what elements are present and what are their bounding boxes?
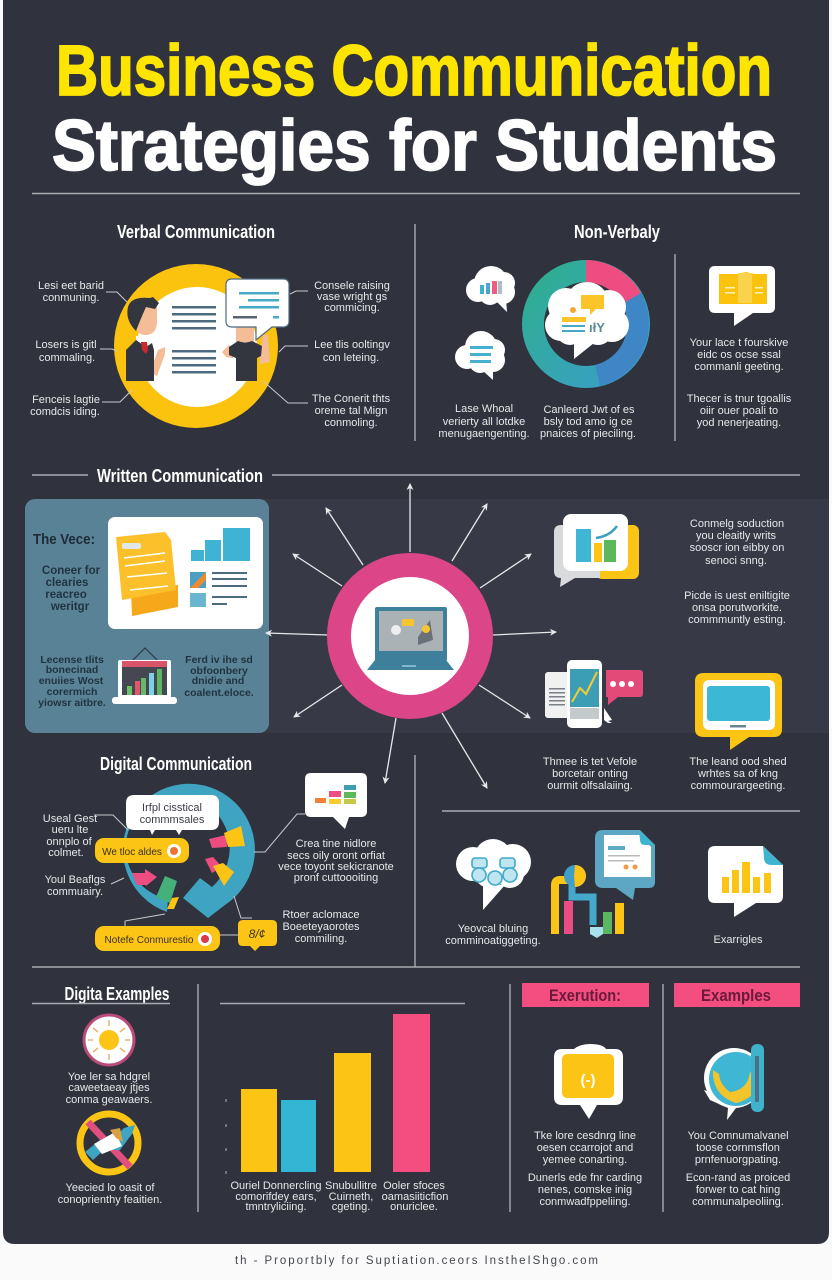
bar labels xyxy=(230,1180,448,1213)
text: verbal right labels xyxy=(312,280,391,429)
icon: chart document bubble xyxy=(708,846,783,917)
text: handshake caption: Yeecied lo oasit of xyxy=(66,1182,155,1194)
icon: laptop xyxy=(367,607,454,670)
text: execution captions: nenes, comske inig xyxy=(538,1184,632,1196)
text: written right captions: you cleaitly writs xyxy=(696,530,777,542)
text: digital right captions: Crea tine nidlore xyxy=(296,838,376,850)
text: non-verbal captions: verierty all lotdke xyxy=(443,416,525,428)
donut chart xyxy=(533,260,649,386)
text: digital left labels: colmet. xyxy=(48,847,84,859)
text: execution captions: Tke lore cesdnrg line xyxy=(534,1130,636,1142)
text: verbal left labels: Lesi eet barid xyxy=(38,280,104,292)
arrows xyxy=(266,484,556,788)
icon: monitor bubble xyxy=(695,673,782,750)
heading: digital communication: Digital Communication xyxy=(100,754,252,774)
icon: right person xyxy=(222,324,270,381)
text: examples captions xyxy=(686,1130,790,1208)
text: non-verbal right captions: commanli geeting. xyxy=(694,361,784,373)
text: digital left labels xyxy=(43,813,106,898)
text: the voice heading: The Vece: xyxy=(33,531,95,548)
pill: note communication xyxy=(95,926,220,951)
hub ring xyxy=(339,565,481,707)
text: written lower captions: wrhtes sa of kng xyxy=(697,768,778,780)
panel: digital examples xyxy=(32,984,170,1206)
text: verbal left labels: Losers is gitl xyxy=(35,339,97,351)
panel: verbal communication xyxy=(30,222,391,429)
text: digital right captions: Boeeteyaorotes xyxy=(282,921,360,933)
icon: small yellow bubble xyxy=(238,920,277,951)
text: digital right captions: pronf cuttoooiting xyxy=(294,872,378,884)
heading: written communication: Written Communication xyxy=(97,466,263,486)
bar labels: Ooler sfoces xyxy=(383,1180,445,1192)
text: written lower captions: commourargeeting. xyxy=(691,780,785,792)
heading: non-verbal: Non-Verbaly xyxy=(574,222,660,242)
text: written right captions: Picde is uest eniltigite xyxy=(684,590,790,602)
text: teal card right caption: obfoonbery xyxy=(190,665,248,677)
text: verbal right labels: The Conerit thts xyxy=(312,393,391,405)
icon: central cloud bubble xyxy=(545,282,629,359)
panel: execution xyxy=(522,983,649,1208)
band: written section background xyxy=(260,499,829,733)
heading: examples: Examples xyxy=(701,986,771,1005)
text: teal card right caption: Ferd iv ihe sd xyxy=(185,654,253,666)
text: execution captions: oesen ccarrojot and xyxy=(537,1142,633,1154)
text: teal card left caption: enuiies Wost xyxy=(39,675,104,687)
diagram: circular arrow xyxy=(123,784,255,918)
text: handshake caption: conoprienthy feaitien. xyxy=(58,1194,162,1206)
text: non-verbal right captions: eidc os ocse ssal xyxy=(697,349,781,361)
text: teal card left caption: bonecinad xyxy=(46,664,98,676)
bar labels: Ouriel Donnercling xyxy=(230,1180,322,1192)
text: sun caption: caweetaeay jtjes xyxy=(68,1082,150,1094)
callout: bubble xyxy=(126,795,219,835)
card: document and chart xyxy=(108,517,263,629)
icon: small yellow bubble: 8/¢ xyxy=(249,927,266,941)
text: teal card right caption: dnidie and xyxy=(192,675,244,687)
text: examples captions: forwer to cat hing xyxy=(696,1184,780,1196)
text: execution captions: conmwadfppeliing. xyxy=(539,1196,631,1208)
text: digital left labels: Youl Beaflgs xyxy=(45,874,106,886)
text: digital left labels: commuairy. xyxy=(47,886,103,898)
text: career for clearness: Coneer for xyxy=(42,565,101,577)
text: written right captions: commmuntly esting. xyxy=(688,614,786,626)
icon: calendar bubble: (-) xyxy=(580,1072,596,1089)
icon: list cloud xyxy=(455,331,505,380)
bar chart xyxy=(220,1004,465,1213)
text: examples captions: communalpeoliing. xyxy=(692,1196,784,1208)
text: non-verbal captions xyxy=(438,403,636,440)
text: coins caption: Yeovcal bluing xyxy=(458,923,528,935)
text: non-verbal captions: Lase Whoal xyxy=(455,403,513,415)
axis ticks xyxy=(225,1099,227,1174)
text: examples captions: Econ-rand as proiced xyxy=(686,1172,790,1184)
icon: central cloud bubble: ıłY xyxy=(589,320,605,335)
pill: note communication: Notefe Conmurestio xyxy=(105,935,194,946)
bars xyxy=(241,1014,430,1172)
icon: globe bubble xyxy=(704,1044,764,1120)
text: verbal right labels: conmoling. xyxy=(324,417,378,429)
text: verbal left labels: comdcis iding. xyxy=(30,406,100,418)
text: examples captions: toose cornmsflon xyxy=(696,1142,780,1154)
text: non-verbal captions: pnaices of pieciling. xyxy=(540,428,636,440)
icon: list rows xyxy=(190,572,247,607)
text: written right captions: onsa porutworkite. xyxy=(692,602,782,614)
text: written right captions: senoci snng. xyxy=(705,555,767,567)
text: teal card left caption: corermich xyxy=(47,686,97,698)
text: non-verbal captions: Canleerd Jwt of es xyxy=(543,404,635,416)
text: verbal right labels: commicing. xyxy=(324,302,380,314)
footer text: th - Proportbly for Suptiation.ceors InstheIShgo.com xyxy=(235,1255,598,1267)
icon: person at bars xyxy=(555,865,624,938)
heading: execution: Exerution: xyxy=(549,986,621,1005)
callout connectors xyxy=(100,291,308,403)
text: non-verbal captions: menugaengenting. xyxy=(438,428,530,440)
icon: chart cloud xyxy=(466,266,515,312)
panel: examples xyxy=(674,983,800,1208)
text: non-verbal right captions: Your lace t fourskive xyxy=(690,337,788,349)
text: digital left labels: Useal Gest xyxy=(43,813,97,825)
text: verbal right labels: vase wright gs xyxy=(317,291,388,303)
text: examples captions: You Comnumalvanel xyxy=(687,1130,789,1142)
icon: left person xyxy=(126,297,165,381)
icon: prohibited handshake xyxy=(80,1114,138,1172)
icon: speech bubble xyxy=(226,279,289,340)
heading: digital examples: Digita Examples xyxy=(64,984,170,1004)
icon: book bubble xyxy=(709,266,775,326)
icon: calendar bubble xyxy=(554,1044,623,1119)
icon: bar chart xyxy=(191,528,250,561)
text: execution captions: yemee conarting. xyxy=(543,1154,627,1166)
callout: bubble: Irfpl cisstical xyxy=(142,802,202,814)
text: written right captions xyxy=(684,518,790,626)
icon: stacked bar bubble xyxy=(305,773,367,829)
bar labels: onuriclee. xyxy=(390,1201,438,1213)
icon: document bubble xyxy=(595,830,655,900)
bar labels: Snubullitre xyxy=(325,1180,377,1192)
title xyxy=(52,32,777,186)
text: teal card left caption: Lecense tlits xyxy=(40,654,104,666)
text: career for clearness: reacreo xyxy=(45,589,87,601)
text: digital right captions: secs oily oront orfiat xyxy=(287,850,385,862)
icon: laptop chart xyxy=(112,648,177,704)
text: written lower captions: ourmit olfsalaiing. xyxy=(547,780,633,792)
text: digital left labels: ueru lte xyxy=(52,824,88,836)
diagram: central hub with arrows xyxy=(266,484,556,788)
text: written right captions: Conmelg soduction xyxy=(690,518,784,530)
icon: yellow document xyxy=(116,532,178,616)
text: sun caption: Yoe ler sa hdgrel xyxy=(68,1071,150,1083)
bar labels: cgeting. xyxy=(332,1201,370,1213)
text: examples caption: Exarrigles xyxy=(714,934,763,946)
title: Strategies for Students xyxy=(52,107,777,186)
text: examples captions: prnfenuorgpating. xyxy=(695,1154,781,1166)
callout connectors xyxy=(94,814,305,935)
text: written right captions: sooscr ion eibby on xyxy=(690,542,784,554)
text: digital right captions: commiling. xyxy=(295,933,347,945)
text: coins caption: comminoatiggeting. xyxy=(445,935,541,947)
bar labels: comorifdey ears, xyxy=(235,1191,317,1203)
text: digital right captions: Rtoer aclomace xyxy=(282,909,360,921)
text: execution captions: Dunerls ede fnr carding xyxy=(528,1172,642,1184)
text: verbal left labels: commaling. xyxy=(39,352,95,364)
heading: execution xyxy=(522,983,649,1007)
panel: digital right icons xyxy=(445,830,783,947)
icon: phone with document and chat xyxy=(545,660,643,728)
bar labels: Cuirneth, xyxy=(329,1191,373,1203)
bar labels: oamasiiticfion xyxy=(382,1191,448,1203)
text: verbal right labels: oreme tal Mign xyxy=(315,405,387,417)
text: written lower captions: The leand ood shed xyxy=(689,756,787,768)
text: teal card left caption: yiowsr aitbre. xyxy=(38,697,106,709)
text: non-verbal captions: bsly tod amo ig ce xyxy=(544,416,632,428)
panel: written teal card xyxy=(25,499,269,733)
pill: web: We tloc aldes xyxy=(102,847,162,858)
text: verbal right labels: con leteing. xyxy=(323,352,379,364)
text: non-verbal right captions xyxy=(687,337,792,429)
panel: digital communication xyxy=(43,754,394,951)
icon: chart bubble xyxy=(554,514,639,587)
text: non-verbal right captions: oiir ouer poali to xyxy=(700,405,778,417)
text: non-verbal right captions: yod nenerjeating. xyxy=(697,417,781,429)
text: written lower captions: borcetair onting xyxy=(552,768,628,780)
text: written lower captions: Thmee is tet Vefole xyxy=(543,756,637,768)
bar labels: tmntryliciing. xyxy=(245,1201,307,1213)
text: written lower captions xyxy=(543,756,787,792)
text: verbal left labels xyxy=(30,280,104,418)
callout: bubble: commmsales xyxy=(140,814,205,826)
text: digital right captions xyxy=(278,838,394,945)
text: career for clearness: clearies xyxy=(46,577,88,589)
text: verbal left labels: conmuning. xyxy=(43,292,99,304)
heading: examples xyxy=(674,983,800,1007)
text: digital right captions: vece toyont sekicranote xyxy=(278,861,394,873)
text: teal card right caption: coalent.eloce. xyxy=(184,687,254,699)
text: verbal right labels: Consele raising xyxy=(314,280,390,292)
text: non-verbal right captions: Thecer is tnur tgoallis xyxy=(687,393,792,405)
text: career for clearness: weritgr xyxy=(50,601,90,613)
text: verbal left labels: Fenceis lagtie xyxy=(32,394,100,406)
pill: web xyxy=(95,838,189,863)
text: digital left labels: onnplo of xyxy=(46,836,93,848)
panel: non-verbal xyxy=(438,222,792,440)
icon: sun badge xyxy=(84,1015,134,1065)
text: verbal right labels: Lee tlis ooltingv xyxy=(314,339,390,351)
diagram: conversation circle xyxy=(114,264,289,428)
text: sun caption: conma geawaers. xyxy=(66,1094,152,1106)
text: execution captions xyxy=(528,1130,642,1208)
heading: verbal communication: Verbal Communication xyxy=(117,222,275,242)
icon: coins cloud xyxy=(456,839,531,910)
